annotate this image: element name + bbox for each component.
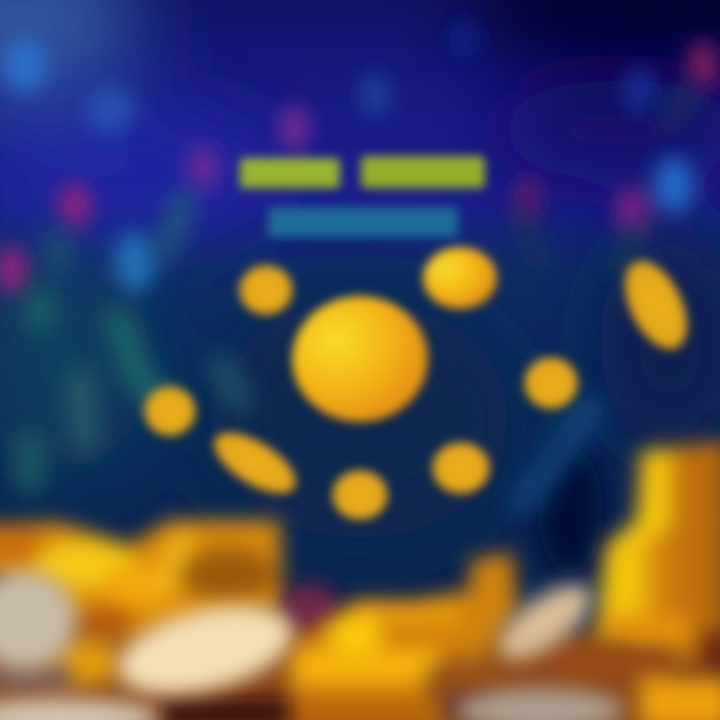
warm base under the coin piles	[0, 590, 720, 720]
dark gap behind right tower	[538, 445, 602, 575]
coin: left	[144, 386, 196, 436]
coin pile: centre	[285, 552, 518, 720]
title: blurred green headline bar	[240, 156, 485, 188]
silver coins	[0, 570, 624, 720]
coin pile: left	[0, 520, 284, 686]
decorative bokeh lights	[0, 20, 718, 294]
silver coin: bottom right	[456, 688, 624, 720]
coin: lower right	[432, 442, 490, 494]
coin: large central	[292, 296, 428, 422]
coin pile: lower right	[440, 650, 720, 720]
silver coin: centre left	[108, 589, 302, 711]
coin stack: right tower	[595, 440, 720, 670]
coin: lower left pair	[204, 420, 306, 506]
silver coin: bottom left	[0, 698, 160, 720]
floating coins	[144, 247, 700, 520]
silver coin: right of centre	[486, 570, 604, 674]
subtitle: blurred blue bar	[268, 207, 458, 237]
background glow patches	[0, 0, 720, 540]
coin: right	[524, 357, 578, 409]
coin: upper right	[423, 247, 497, 309]
background chart bars	[30, 90, 690, 500]
coin: bottom centre	[332, 470, 388, 520]
maroon gap	[282, 584, 338, 632]
coin: far right tilted	[612, 250, 700, 360]
coin: upper left	[239, 265, 293, 315]
silver coin: far left	[0, 570, 77, 670]
bottom dark base	[0, 665, 290, 720]
